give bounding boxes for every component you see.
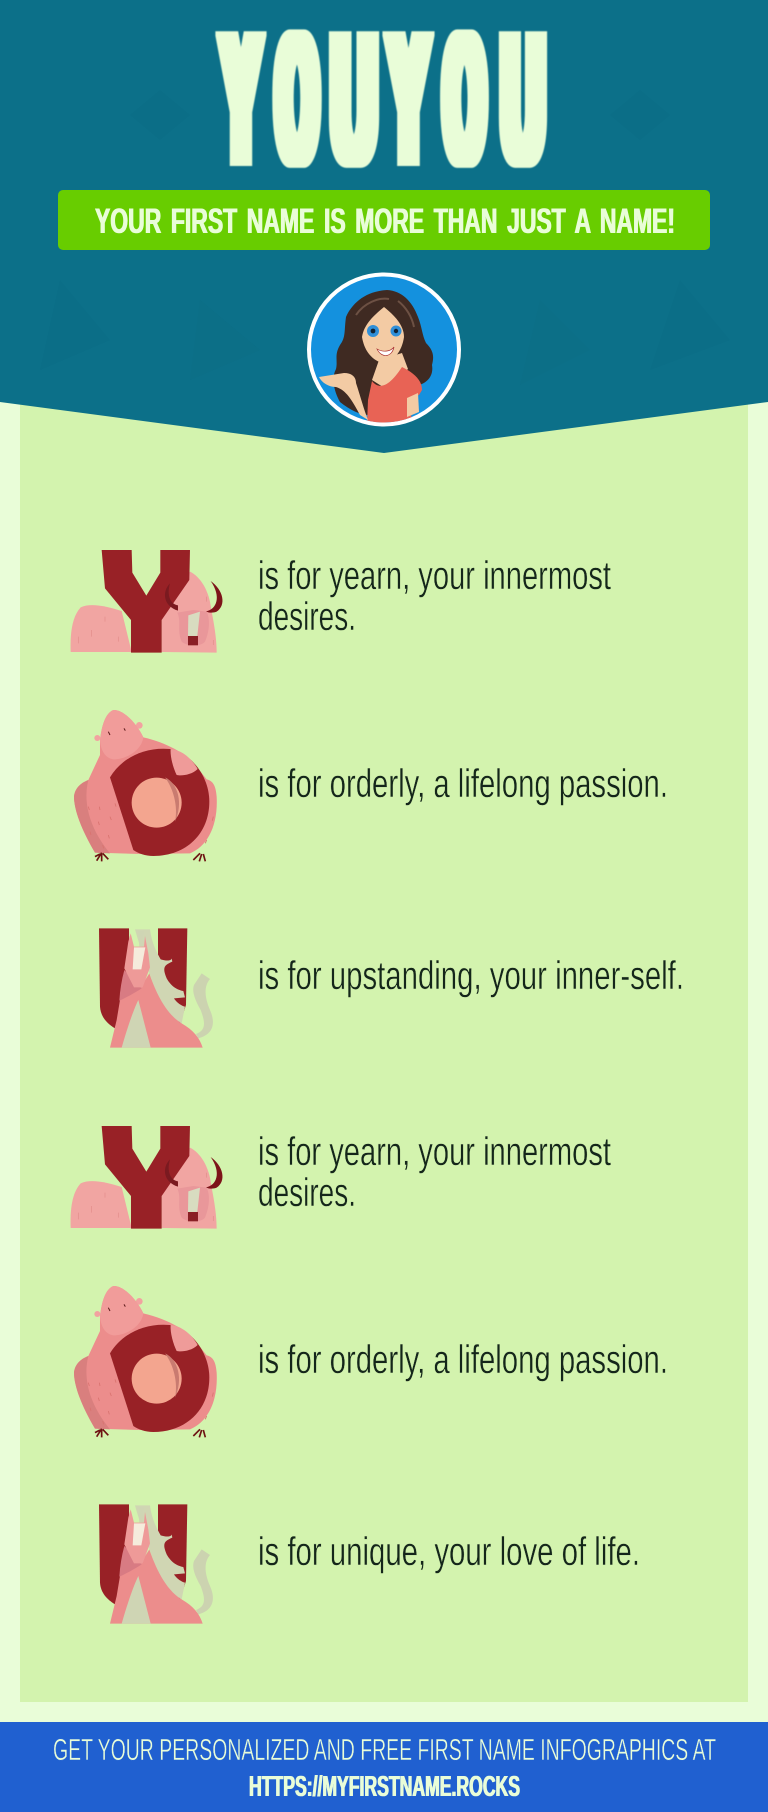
footer url: HTTPS://MYFIRSTNAME.ROCKS — [249, 1771, 520, 1803]
subtitle banner — [58, 190, 710, 250]
row 6: U icon — [99, 1504, 213, 1624]
footer — [0, 1722, 768, 1812]
title — [221, 0, 544, 205]
face — [362, 307, 404, 363]
row 1 text: desires. — [258, 595, 356, 639]
background panel — [0, 380, 768, 1725]
mouth — [377, 347, 394, 356]
row 2: O icon — [74, 710, 217, 861]
shirt — [367, 367, 422, 425]
row 4: Y icon — [71, 1126, 223, 1229]
row 4 text: is for yearn, your innermost — [258, 1130, 611, 1174]
row 1: Y icon — [71, 550, 223, 653]
row 1 text — [258, 554, 611, 639]
eyes — [367, 325, 379, 337]
row 5: O icon — [74, 1286, 217, 1437]
neck — [372, 353, 408, 389]
avatar: cartoon woman in circle — [309, 274, 459, 425]
arms — [319, 373, 368, 420]
hair — [333, 290, 433, 415]
row 4 text — [258, 1130, 611, 1215]
header banner shape — [0, 0, 768, 453]
row 4 text: desires. — [258, 1171, 356, 1215]
row 1 text: is for yearn, your innermost — [258, 554, 611, 598]
inner content panel — [20, 380, 748, 1702]
row 3: U icon — [99, 928, 213, 1048]
row 6 text: is for unique, your love of life. — [258, 1530, 640, 1574]
